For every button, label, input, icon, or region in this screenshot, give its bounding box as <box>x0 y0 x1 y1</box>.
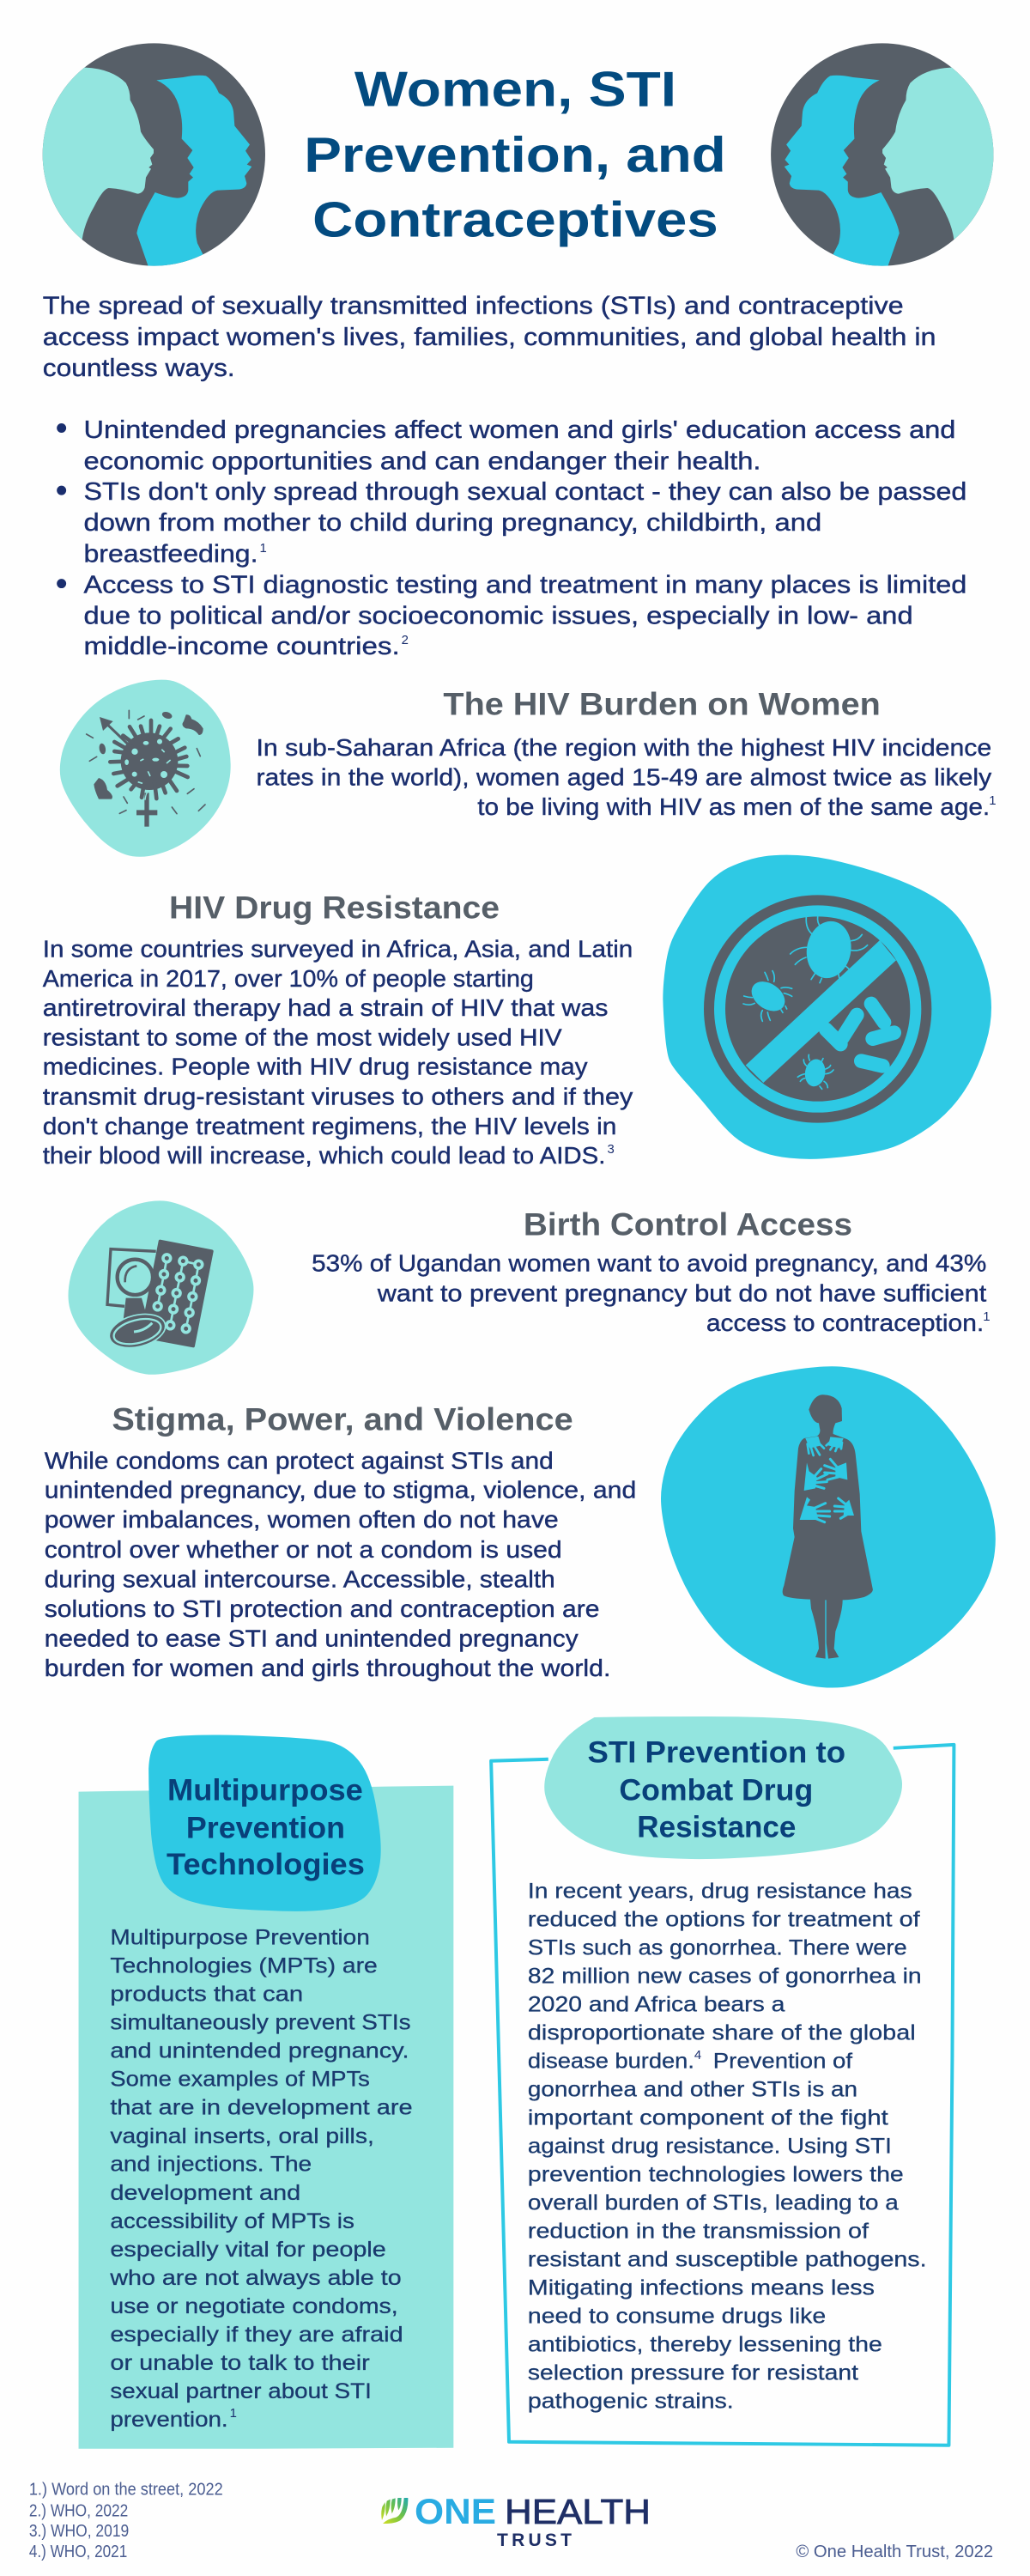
panel: Multipurpose Prevention Technologies: and unintended pregnancy. <box>110 2039 409 2063</box>
panel: Multipurpose Prevention Technologies: Multipurpose <box>167 1774 363 1807</box>
text: stigma, power, and violence: solutions to STI protection and contraception are <box>45 1595 599 1622</box>
text: HIV drug resistance: resistant to some of the most widely used HIV <box>43 1024 562 1051</box>
text: stigma, power, and violence <box>45 1447 636 1681</box>
text: HIV burden: to be living with HIV as men of the same age. <box>477 793 990 820</box>
text: stigma, power, and violence: during sexual intercourse. Accessible, stealth <box>45 1566 555 1593</box>
bullet list: middle-income countries. <box>84 633 400 660</box>
text: HIV drug resistance: medicines. People with HIV drug resistance may <box>43 1054 588 1080</box>
text: birth control access: want to prevent pregnancy but do not have sufficient <box>377 1279 987 1306</box>
icon: left women profiles <box>43 43 265 266</box>
bullet list: breastfeeding. <box>84 541 258 568</box>
text: HIV burden: In sub-Saharan Africa (the region with the highest HIV incidence <box>257 734 991 761</box>
panel: STI Prevention to Combat Drug Resistance: STIs such as gonorrhea. There were <box>528 1936 907 1960</box>
panel: STI Prevention to Combat Drug Resistance: 2020 and Africa bears a <box>528 1992 785 2016</box>
text: birth control access: access to contraception. <box>706 1309 984 1336</box>
logo: One Health Trust: HEALTH <box>505 2492 651 2531</box>
panel: Multipurpose Prevention Technologies: prevention. <box>110 2408 228 2432</box>
panel: STI Prevention to Combat Drug Resistance: STI Prevention to <box>588 1736 845 1770</box>
panel: STI Prevention to Combat Drug Resistance: Resistance <box>637 1810 796 1844</box>
text: stigma, power, and violence: power imbalances, women often do not have <box>45 1506 559 1533</box>
references list: 1.) Word on the street, 2022 <box>29 2480 223 2499</box>
panel: Multipurpose Prevention Technologies <box>79 1735 453 2449</box>
panel: Multipurpose Prevention Technologies: Technologies <box>167 1848 365 1881</box>
panel: Multipurpose Prevention Technologies: 1 <box>230 2406 237 2421</box>
panel: STI Prevention to Combat Drug Resistance: disease burden. <box>528 2050 694 2074</box>
panel: Multipurpose Prevention Technologies: who are not always able to <box>109 2266 402 2290</box>
text: birth control access <box>312 1249 991 1336</box>
text: birth control access: 1 <box>983 1309 991 1324</box>
panel: STI Prevention to Combat Drug Resistance: gonorrhea and other STIs is an <box>528 2078 857 2102</box>
panel: STI Prevention to Combat Drug Resistance: 4 <box>694 2048 701 2063</box>
panel: Multipurpose Prevention Technologies: or unable to talk to their <box>110 2351 370 2375</box>
heading: Stigma, Power, and Violence: Stigma, Power, and Violence <box>112 1402 573 1437</box>
bullet list: due to political and/or socioeconomic issues, especially in low- and <box>84 602 913 629</box>
panel: Multipurpose Prevention Technologies: Technologies (MPTs) are <box>110 1954 378 1978</box>
heading: HIV Drug Resistance: HIV Drug Resistance <box>169 890 500 925</box>
text: HIV drug resistance: America in 2017, over 10% of people starting <box>43 965 534 992</box>
bullet list: 1 <box>259 541 267 556</box>
title: Prevention, and <box>304 128 726 183</box>
text: stigma, power, and violence: needed to ease STI and unintended pregnancy <box>45 1625 579 1651</box>
panel: STI Prevention to Combat Drug Resistance <box>491 1716 954 2445</box>
panel: Multipurpose Prevention Technologies: Prevention <box>186 1811 345 1844</box>
panel: STI Prevention to Combat Drug Resistance: reduction in the transmission of <box>528 2220 869 2244</box>
panel: STI Prevention to Combat Drug Resistance: In recent years, drug resistance has <box>528 1879 912 1903</box>
panel: STI Prevention to Combat Drug Resistance: reduced the options for treatment of <box>528 1907 921 1931</box>
title: Contraceptives <box>312 193 718 248</box>
text: HIV drug resistance: transmit drug-resistant viruses to others and if they <box>43 1083 633 1109</box>
panel: Multipurpose Prevention Technologies: products that can <box>110 1983 303 2007</box>
panel: Multipurpose Prevention Technologies: simultaneously prevent STIs <box>110 2011 411 2035</box>
icon: woman silhouette with hands <box>661 1366 996 1688</box>
text: stigma, power, and violence: unintended pregnancy, due to stigma, violence, and <box>45 1477 636 1504</box>
panel: STI Prevention to Combat Drug Resistance: antibiotics, thereby lessening the <box>528 2333 882 2357</box>
panel: STI Prevention to Combat Drug Resistance: overall burden of STIs, leading to a <box>528 2191 900 2215</box>
text: stigma, power, and violence: While condoms can protect against STIs and <box>45 1447 554 1473</box>
panel: STI Prevention to Combat Drug Resistance: Combat Drug <box>619 1774 813 1807</box>
heading: Birth Control Access: Birth Control Access <box>524 1207 852 1242</box>
logo: One Health Trust <box>381 2491 651 2550</box>
panel: Multipurpose Prevention Technologies: accessibility of MPTs is <box>110 2209 354 2233</box>
references list: 2.) WHO, 2022 <box>29 2501 128 2520</box>
panel: Multipurpose Prevention Technologies: that are in development are <box>110 2096 413 2120</box>
panel: STI Prevention to Combat Drug Resistance: 82 million new cases of gonorrhea in <box>528 1964 922 1988</box>
references list: 3.) WHO, 2019 <box>29 2522 129 2541</box>
icon: right women profiles <box>771 43 994 266</box>
panel: STI Prevention to Combat Drug Resistance: Prevention of <box>713 2050 853 2074</box>
panel: Multipurpose Prevention Technologies: development and <box>110 2181 300 2205</box>
title <box>304 62 726 248</box>
panel: STI Prevention to Combat Drug Resistance: need to consume drugs like <box>528 2305 826 2329</box>
panel: STI Prevention to Combat Drug Resistance: disproportionate share of the global <box>528 2021 916 2045</box>
intro paragraph <box>43 293 936 382</box>
bullet list: STIs don't only spread through sexual contact - they can also be passed <box>84 478 966 506</box>
icon: birth control pills and mirror <box>69 1200 253 1375</box>
panel: STI Prevention to Combat Drug Resistance: against drug resistance. Using STI <box>528 2135 892 2159</box>
panel: Multipurpose Prevention Technologies: use or negotiate condoms, <box>110 2294 398 2318</box>
panel: Multipurpose Prevention Technologies: Multipurpose Prevention <box>110 1926 370 1950</box>
intro paragraph: countless ways. <box>43 355 235 382</box>
bullet list: down from mother to child during pregnancy, childbirth, and <box>84 509 821 537</box>
text: HIV burden <box>256 734 997 820</box>
panel: STI Prevention to Combat Drug Resistance: resistant and susceptible pathogens. <box>528 2248 927 2272</box>
bullet list: economic opportunities and can endanger their health. <box>84 447 761 475</box>
bullet list: 2 <box>402 633 409 647</box>
panel: Multipurpose Prevention Technologies: Some examples of MPTs <box>110 2068 370 2092</box>
panel: STI Prevention to Combat Drug Resistance: selection pressure for resistant <box>528 2361 858 2385</box>
text: HIV drug resistance: antiretroviral therapy had a strain of HIV that was <box>43 994 608 1021</box>
panel: STI Prevention to Combat Drug Resistance: prevention technologies lowers the <box>528 2163 904 2187</box>
text: HIV burden: rates in the world), women aged 15-49 are almost twice as likely <box>257 763 991 790</box>
text: HIV drug resistance: 3 <box>607 1142 615 1157</box>
references list <box>29 2480 223 2561</box>
text: stigma, power, and violence: burden for women and girls throughout the world. <box>45 1655 610 1681</box>
text: HIV drug resistance: their blood will increase, which could lead to AIDS. <box>43 1142 605 1169</box>
bullet list: Unintended pregnancies affect women and girls' education access and <box>84 416 955 444</box>
text: stigma, power, and violence: control over whether or not a condom is used <box>45 1536 562 1563</box>
logo: One Health Trust: TRUST <box>497 2530 572 2550</box>
text: HIV burden: 1 <box>989 793 997 808</box>
bullet list: Access to STI diagnostic testing and treatment in many places is limited <box>84 572 966 599</box>
text: birth control access: 53% of Ugandan women want to avoid pregnancy, and 43% <box>312 1249 986 1276</box>
intro paragraph: access impact women's lives, families, communities, and global health in <box>43 324 936 351</box>
logo: One Health Trust: ONE <box>415 2491 496 2531</box>
bullet list <box>57 416 966 660</box>
panel: STI Prevention to Combat Drug Resistance: pathogenic strains. <box>528 2390 734 2414</box>
title: Women, STI <box>354 62 676 117</box>
panel: Multipurpose Prevention Technologies: especially vital for people <box>110 2238 386 2262</box>
text: HIV drug resistance: In some countries surveyed in Africa, Asia, and Latin <box>43 935 633 962</box>
panel: Multipurpose Prevention Technologies: vaginal inserts, oral pills, <box>110 2124 374 2148</box>
copyright: © One Health Trust, 2022 <box>796 2543 993 2561</box>
panel: Multipurpose Prevention Technologies: and injections. The <box>110 2153 312 2177</box>
heading shape: Multipurpose Prevention Technologies <box>148 1735 381 1911</box>
heading: The HIV Burden on Women: The HIV Burden on Women <box>443 687 881 722</box>
panel: Multipurpose Prevention Technologies: especially if they are afraid <box>110 2323 403 2347</box>
panel: Multipurpose Prevention Technologies: sexual partner about STI <box>110 2379 372 2403</box>
text: HIV drug resistance: don't change treatment regimens, the HIV levels in <box>43 1113 616 1139</box>
references list: 4.) WHO, 2021 <box>29 2543 127 2561</box>
text: HIV drug resistance <box>43 935 633 1169</box>
icon: virus and female symbol <box>60 680 231 857</box>
panel: STI Prevention to Combat Drug Resistance: Mitigating infections means less <box>528 2276 875 2300</box>
icon: no bugs or bacteria <box>663 855 991 1159</box>
heading shape: STI Prevention to Combat Drug Resistance <box>544 1716 902 1859</box>
panel: STI Prevention to Combat Drug Resistance: important component of the fight <box>528 2106 888 2130</box>
intro paragraph: The spread of sexually transmitted infections (STIs) and contraceptive <box>43 293 904 320</box>
